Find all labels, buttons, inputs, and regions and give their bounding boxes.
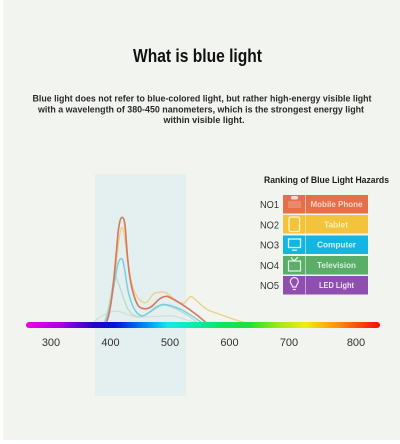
curve: television green [104,274,197,323]
icon: tablet [289,217,300,232]
ranking row 4: television: NO4 [260,260,279,272]
description text: Blue light does not refer to blue-colored light, but rather high-energy visible light [32,94,372,104]
wavelength axis labels: 700 [280,337,298,349]
ranking row 5: LED light: NO5 [260,280,279,292]
ranking row 3: computer [260,236,368,254]
blue light band 380-450 nm [95,174,186,396]
ranking row 5: LED light: LED Light [319,280,354,290]
ranking row 3: computer: NO3 [260,240,279,252]
ranking heading: Ranking of Blue Light Hazards [264,175,389,186]
icon: light bulb [290,278,298,290]
curve: tablet yellow [107,227,245,323]
title: What is blue light [133,46,262,66]
ranking row 3: computer: Computer [317,240,357,250]
ranking row 5: LED light [260,276,368,294]
description text: with a wavelength of 380-450 nanometers, which is the strongest energy light [37,104,365,116]
icon: monitor [288,239,300,251]
wavelength axis labels: 300 [42,337,60,349]
description text [32,94,372,126]
ranking row 2: tablet: NO2 [260,220,279,232]
wavelength axis labels: 500 [161,337,179,349]
wavelength axis labels [42,337,365,349]
icon: tv [288,257,300,271]
wavelength axis labels: 400 [101,337,120,349]
ranking row 4: television [260,256,368,274]
ranking row 2: tablet [260,215,368,234]
ranking row 1: mobile phone: Mobile Phone [310,199,363,209]
ranking row 1: mobile phone: NO1 [260,199,279,211]
wavelength spectrum bar [26,322,380,328]
curve: computer blue [105,259,202,323]
wavelength axis labels: 600 [220,337,239,349]
curve: mobile phone red [107,217,206,323]
wavelength axis labels: 800 [347,337,365,349]
icon: phone [288,196,301,208]
curve: LED light grey [94,311,195,322]
ranking row 2: tablet: Tablet [324,220,348,230]
emission spectrum curves [94,217,245,323]
ranking row 4: television: Television [317,260,356,270]
ranking row 1: mobile phone [260,195,368,214]
description text: within visible light. [163,115,244,126]
